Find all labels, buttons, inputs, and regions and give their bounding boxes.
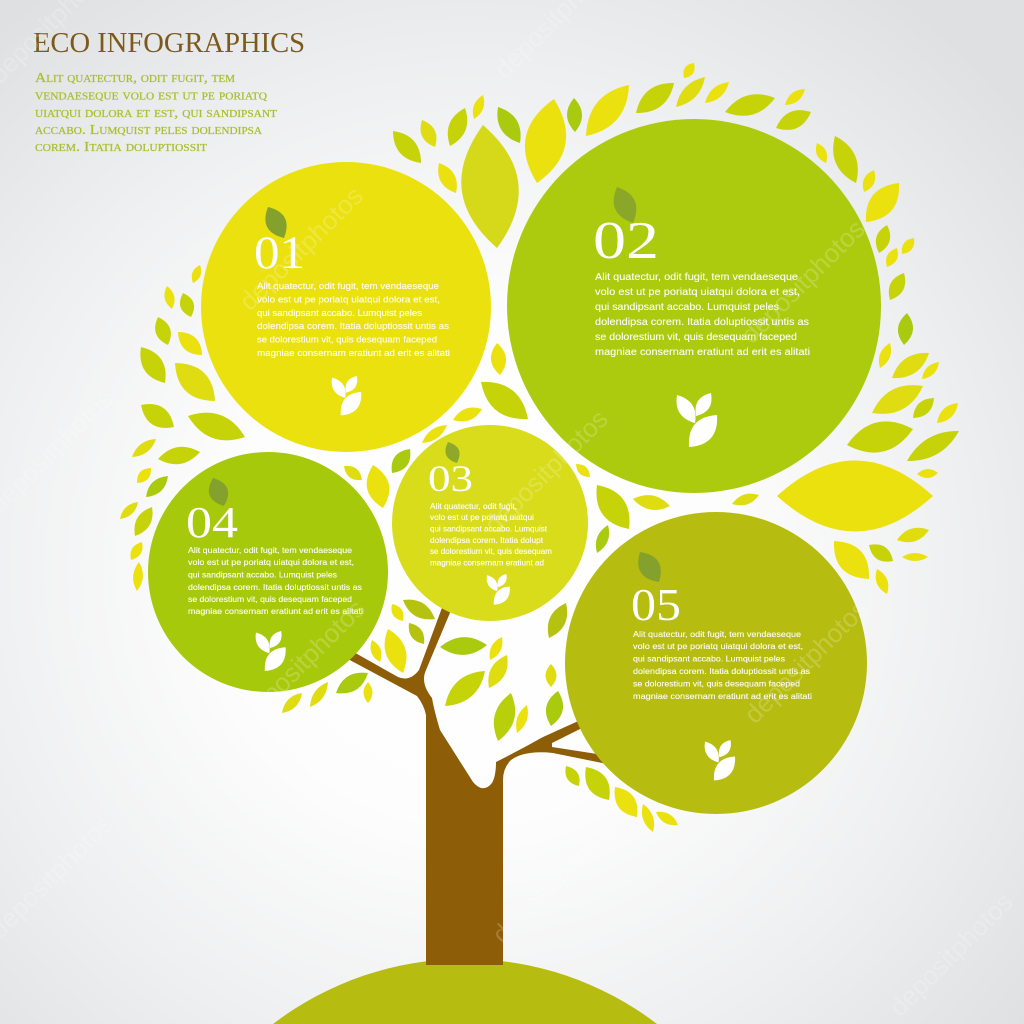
panel: circle 04 bbox=[148, 452, 388, 692]
text block 01 bbox=[257, 280, 450, 358]
text block 04: dolendipsa corem. Itatia doluptiossit untis as bbox=[188, 582, 362, 592]
watermarks: depositphotos bbox=[235, 594, 371, 729]
text block 03 bbox=[430, 502, 552, 568]
ground hill bbox=[273, 959, 657, 1024]
intro text block bbox=[35, 71, 277, 155]
intro text block: Alit quatectur, odit fugit, tem bbox=[35, 71, 235, 86]
watermarks: depositphotos bbox=[233, 181, 369, 316]
icon: dark leaf 05 bbox=[631, 546, 668, 588]
text block 05: volo est ut pe poriatq uiatqui dolora et est, bbox=[633, 641, 803, 651]
tree trunk and branches bbox=[346, 605, 612, 965]
text block 01: volo est ut pe poriatq uiatqui dolora et est, bbox=[257, 294, 440, 304]
panel: circle 05 bbox=[565, 512, 867, 814]
text block 05 bbox=[633, 629, 812, 701]
text block 04: magniae consernam eratiunt ad erit es alitati bbox=[188, 606, 363, 616]
panel: circle 01 bbox=[201, 162, 491, 452]
watermarks: depositphotos bbox=[738, 594, 874, 729]
number 04: 04 bbox=[186, 498, 238, 547]
text block 05: qui sandipsant accabo. Lumquist peles bbox=[633, 654, 785, 664]
text block 01: dolendipsa corem. Itatia doluptiossit untis as bbox=[257, 320, 449, 331]
text block 03: se dolorestium vit, quis desequam bbox=[430, 547, 552, 556]
icon: dark leaf 03 bbox=[442, 439, 463, 466]
number 01: 01 bbox=[254, 227, 305, 279]
title: ECO INFOGRAPHICS bbox=[33, 28, 305, 59]
watermarks: depositphotos bbox=[486, 814, 622, 949]
number 03: 03 bbox=[428, 459, 473, 500]
watermarks: depositphotos bbox=[478, 404, 614, 539]
text block 02: dolendipsa corem. Itatia doluptiossit untis as bbox=[595, 317, 809, 328]
text block 02: Alit quatectur, odit fugit, tem vendaeseque bbox=[595, 272, 798, 283]
intro text block: accabo. Lumquist peles dolendipsa bbox=[35, 123, 263, 138]
panel: circle 02 bbox=[507, 119, 881, 493]
number 02: 02 bbox=[593, 212, 659, 270]
text block 02: volo est ut pe poriatq uiatqui dolora et est, bbox=[595, 287, 800, 298]
text block 01: se dolorestium vit, quis desequam faceped bbox=[257, 334, 437, 344]
text block 01: Alit quatectur, odit fugit, tem vendaeseque bbox=[257, 280, 439, 291]
icon: dark leaf 04 bbox=[204, 474, 233, 510]
text block 04: se dolorestium vit, quis desequam faceped bbox=[188, 594, 352, 604]
icon: dark leaf 01 bbox=[259, 202, 293, 243]
text block 05: Alit quatectur, odit fugit, tem vendaeseque bbox=[633, 629, 801, 639]
text block 04: Alit quatectur, odit fugit, tem vendaeseque bbox=[188, 545, 352, 555]
icon: dark leaf 02 bbox=[607, 183, 643, 227]
icon: white sprig 01 bbox=[327, 373, 367, 421]
text block 03: dolendipsa corem. Itatia dolupt bbox=[430, 536, 544, 545]
text block 04: qui sandipsant accabo. Lumquist peles bbox=[188, 570, 337, 580]
icon: white sprig 05 bbox=[700, 737, 741, 786]
text block 05: se dolorestium vit, quis desequam faceped bbox=[633, 678, 800, 688]
text block 03: Alit quatectur, odit fugit, bbox=[430, 502, 517, 511]
text block 04 bbox=[188, 545, 363, 616]
text block 03: volo est ut pe poriatq uiatqui bbox=[430, 513, 534, 522]
text block 02: magniae consernam eratiunt ad erit es alitati bbox=[595, 347, 810, 358]
text block 05: dolendipsa corem. Itatia doluptiossit untis as bbox=[633, 666, 810, 676]
text block 02 bbox=[595, 272, 810, 358]
icon: white sprig 04 bbox=[251, 628, 292, 676]
leaves: tree canopy bbox=[117, 60, 963, 834]
text block 01: qui sandipsant accabo. Lumquist peles bbox=[257, 307, 422, 318]
watermarks: depositphotos bbox=[735, 214, 871, 349]
watermarks: depositphotos bbox=[883, 887, 1019, 1022]
text block 03: magniae consernam eratiunt ad bbox=[430, 558, 544, 568]
intro text block: vendaeseque volo est ut pe poriatq bbox=[35, 88, 268, 104]
text block 01: magniae consernam eratiunt ad erit es alitati bbox=[257, 347, 450, 358]
text block 03: qui sandipsant accabo. Lumquist bbox=[430, 524, 548, 534]
intro text block: uiatqui dolora et est, qui sandipsant bbox=[35, 106, 277, 121]
text block 04: volo est ut pe poriatq uiatqui dolora et est, bbox=[188, 557, 354, 567]
panel: circle 03 bbox=[392, 425, 588, 621]
number 05: 05 bbox=[631, 579, 681, 630]
icon: white sprig 03 bbox=[483, 572, 514, 609]
text block 05: magniae consernam eratiunt ad erit es alitati bbox=[633, 691, 812, 701]
text block 02: se dolorestium vit, quis desequam faceped bbox=[595, 332, 797, 343]
text block 02: qui sandipsant accabo. Lumquist peles bbox=[595, 302, 779, 313]
icon: white sprig 02 bbox=[671, 389, 725, 454]
intro text block: corem. Itatia doluptiossit bbox=[35, 140, 207, 155]
